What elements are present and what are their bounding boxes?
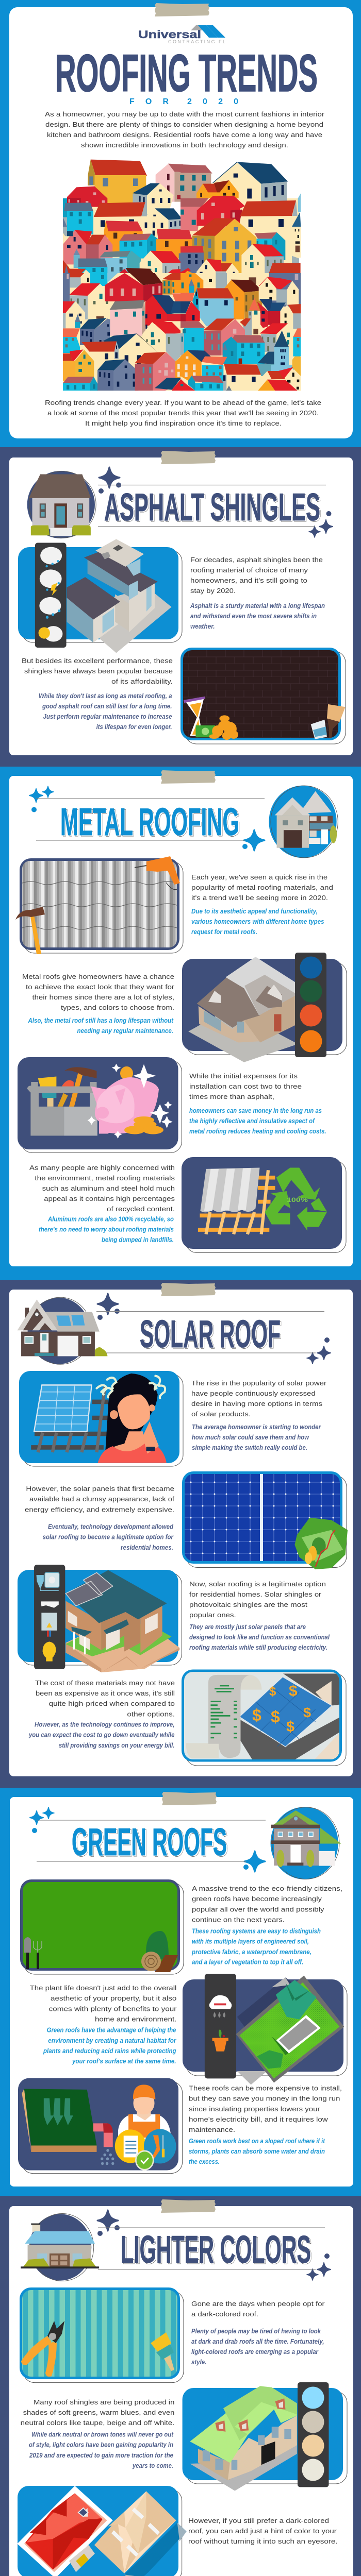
panel: solar roof section (9, 1283, 353, 1776)
text: lighter colors intro: Gone are the days when people opt for (191, 2300, 325, 2308)
text: green roof cost: home's electricity bill, and it requires low (189, 2115, 328, 2123)
text: asphalt intro: Asphalt is a sturdy material with a long lifespan (190, 602, 325, 609)
text: asphalt intro (190, 556, 325, 630)
text: lighter color shades: neutral colors like taupe, beige and off white. (21, 2419, 174, 2427)
heading rules (96, 1312, 324, 1353)
heading: green roofs: GREEN ROOFS (72, 1820, 227, 1863)
text: lighter colors intro: a dark-colored roof. (191, 2310, 258, 2318)
text: lighter color alternatives: roof, you can add just a hint of color to your (188, 2527, 337, 2535)
text: green roof cost: storms, plants can absorb some water and drain (189, 2147, 325, 2155)
panel: weather resistant building (18, 539, 182, 653)
text: metal cost (189, 1072, 326, 1135)
tape (155, 3, 209, 16)
text: metal cost: the highly reflective and insulative aspect of (189, 1117, 315, 1125)
heading: metal roofing (60, 800, 240, 844)
text: metal cost: installation can cost two to three (189, 1082, 302, 1090)
intro text: shown incredible innovations in both technology and design. (81, 141, 288, 149)
text: green roof cost: These roofs can be more expensive to install, (189, 2084, 342, 2092)
text: metal environment: such as aluminum and steel hold much (42, 1184, 175, 1192)
text: lighter color alternatives: roof without turning it into such an eyesore. (188, 2537, 337, 2545)
heading: green roofs: GREEN ROOFS (73, 1821, 228, 1865)
panel: metal roof house with color swatches (182, 953, 347, 1062)
text: green roof benefits: comes with plenty of benefits to your (49, 2005, 177, 2012)
illustration: colorful city of houses (63, 160, 301, 391)
panel: green roofs section (10, 1792, 353, 2187)
text: solar shingles: Now, solar roofing is a legitimate option (189, 1580, 326, 1588)
text: metal cost: metal roofing reduces heating and cooling costs. (189, 1127, 326, 1135)
text: solar popularity: desire in having more options in terms (191, 1400, 323, 1408)
panel: metal roof panels with tools (15, 856, 183, 954)
strip: rain and plant icons (205, 1974, 236, 2078)
text: solar popularity: The average homeowner is starting to wonder (192, 1423, 321, 1431)
text: metal cost: times more than asphalt, (189, 1093, 274, 1100)
text: metal environment: the environment, metal roofing materials (35, 1174, 175, 1182)
text: solar cost: However, as the technology continues to improve, (35, 1721, 174, 1728)
subtitle: FOR (129, 97, 169, 106)
panel: light green roof house with swatches (183, 2382, 347, 2491)
text: metal popularity: popularity of metal roofing materials, and (191, 884, 333, 891)
tape (162, 1792, 217, 1805)
text: lighter colors intro: style. (191, 2358, 206, 2366)
text: asphalt intro: weather. (190, 622, 215, 630)
text: solar popularity (191, 1379, 327, 1451)
text: solar popularity: of solar products. (191, 1410, 251, 1418)
text: metal environment: appeal as it contains high percentages (44, 1195, 175, 1202)
panel: asphalt shingles section (9, 451, 353, 755)
text: lighter colors intro: Plenty of people may be tired of having to look (191, 2327, 321, 2335)
icon: solar house (17, 1297, 107, 1364)
text: solar history: energy efficiency, and extremely expensive. (25, 1506, 174, 1514)
icon: asphalt house (27, 471, 96, 538)
text: metal styles (22, 973, 175, 1035)
text: green roofs intro: These roofing systems are easy to distinguish (192, 1927, 321, 1935)
text: metal styles: types, and colors to choose from. (61, 1004, 174, 1011)
text: asphalt affordability: of its affordability. (111, 677, 173, 685)
text: metal popularity (191, 873, 333, 936)
text: solar cost: still providing savings on your energy bill. (59, 1741, 174, 1749)
logo: Universal Contracting FL: CONTRACTING FL (168, 39, 225, 44)
sparkles (97, 1294, 331, 1364)
intro text: kitchen and bathroom designs. Residential roofs have come a long way and have (47, 131, 322, 139)
heading rules (98, 2228, 325, 2269)
text: metal popularity: Each year, we've seen a quick rise in the (191, 873, 327, 881)
text: metal styles: their homes since there are a lot of styles, (32, 993, 174, 1001)
text: solar history: solar roofing to become a legitimate option for (43, 1533, 174, 1541)
text: green roof cost: but they can save you money in the long run (189, 2095, 340, 2103)
panel: aerial green roof (183, 1974, 347, 2084)
text: asphalt affordability: its lifespan for even longer. (96, 723, 172, 731)
text: lighter color shades: While dark neutral or brown tones will never go out (31, 2431, 174, 2438)
text: green roof benefits (30, 1984, 177, 2065)
dollar signs: $ (303, 1705, 311, 1720)
text: green roof cost: the excess. (189, 2158, 220, 2165)
sparkles (30, 1807, 265, 1872)
sparkles (99, 467, 333, 537)
text: solar shingles (189, 1580, 330, 1651)
dollar signs: $ (286, 1719, 294, 1735)
logo: Universal Contracting FL (138, 25, 225, 44)
text: green roof benefits: plants and reducing acid rains while protecting (43, 2047, 176, 2055)
text: metal styles: Also, the metal roof still has a long lifespan without (28, 1016, 174, 1024)
panel: drainage board and maintenance worker (18, 2078, 183, 2174)
dollar signs: $ (289, 1683, 298, 1700)
icon: fan of cash with arrow (294, 1518, 348, 1569)
icon: pliers (21, 2321, 64, 2377)
text: metal environment: Aluminum roofs are also 100% recyclable, so (47, 1215, 174, 1223)
text: asphalt intro: stay by 2020. (190, 587, 236, 595)
text: lighter color shades: 2019 and are expected to gain more traction for the (29, 2451, 173, 2459)
dollar signs: $ (271, 1707, 280, 1726)
dollar signs: $ (269, 1685, 276, 1699)
heading rules (37, 1820, 266, 1861)
text: green roofs intro (191, 1885, 342, 1966)
panel: woman considering solar panels (19, 1371, 183, 1466)
closing intro text (45, 399, 321, 427)
text: asphalt affordability: Just perform regular maintenance to increase (43, 713, 172, 720)
text: metal popularity: various homeowners with different home types (191, 918, 324, 925)
tape (161, 451, 216, 464)
panel: lighter colors section (9, 2199, 353, 2576)
panel: grass turf with tools (20, 1879, 184, 1974)
text: metal popularity: request for metal roofs. (191, 928, 257, 936)
text: asphalt affordability: While they don't last as long as metal roofing, a (39, 692, 172, 700)
text: asphalt intro: For decades, asphalt shingles been the (190, 556, 323, 564)
closing intro text: a look at some of the most popular trends this year that we'll be seeing in 2020. (47, 409, 319, 417)
text: solar shingles: photovoltaic shingles are the most (189, 1601, 307, 1608)
text: lighter color shades: of style, light colors have been gaining popularity in (29, 2441, 173, 2449)
text: solar shingles: roofing materials while still producing electricity. (189, 1643, 327, 1651)
swatch strip (295, 953, 326, 1057)
text: green roofs intro: green roofs have become increasingly (192, 1895, 322, 1903)
icon: drill (146, 856, 180, 885)
text: metal styles: Metal roofs give homeowners have a chance (22, 973, 174, 980)
text: solar popularity: have people continuously expressed (191, 1389, 316, 1397)
tape (161, 1283, 216, 1296)
panel: recyclable metal sheet (182, 1157, 346, 1253)
text: solar cost: you can expect the cost to go down eventually while (28, 1731, 174, 1739)
icon: green roof house (271, 1807, 341, 1879)
heading rules (98, 485, 326, 527)
text: solar popularity: simple making the switch really could be. (192, 1444, 307, 1451)
text: lighter color shades (21, 2398, 174, 2469)
text: green roofs intro: with its multiple layers of engineered soil, (192, 1938, 309, 1945)
text: green roofs intro: protective fabric, a waterproof membrane, (191, 1948, 311, 1956)
closing intro text: Roofing trends change every year. If you want to be ahead of the game, let's take (45, 399, 321, 406)
text: green roofs intro: popular all over the world and possibly (192, 1905, 324, 1913)
icon: light blue roof house (21, 2213, 99, 2281)
text: asphalt affordability: shingles have always been popular because (24, 667, 173, 675)
text: lighter colors intro (191, 2300, 325, 2366)
intro text: design. But there are plenty of things to consider when designing a home beyond (45, 121, 323, 128)
text: metal environment: As many people are highly concerned with (29, 1164, 175, 1172)
text: solar shingles: They are mostly just solar panels that are (189, 1623, 306, 1631)
strip: plug, lamp, panel and bulb icons (34, 1565, 65, 1669)
panel: receipt and solar roof with dollars (182, 1669, 346, 1766)
icon: hammer (15, 907, 45, 954)
heading: green roofs (72, 1820, 228, 1865)
text: green roof benefits: your roof's surface at the same time. (72, 2057, 176, 2065)
text: lighter colors intro: at dark and drab roofs all the time. Fortunately, (191, 2337, 324, 2345)
text: solar popularity: how much solar could save them and how (192, 1433, 309, 1441)
panel: blue solar panels with cash (182, 1471, 348, 1569)
sparkles (97, 2210, 331, 2280)
text: metal styles: needing any regular maintenance. (77, 1027, 173, 1035)
text: lighter color alternatives: However, if you still prefer a dark-colored (188, 2517, 329, 2524)
label: 100%: 100% (287, 1196, 308, 1204)
text: green roof cost: maintenance. (189, 2126, 235, 2133)
text: solar history: However, the solar panels that first became (26, 1485, 174, 1493)
text: metal popularity: it's a trend we'll be seeing more in 2020. (191, 894, 328, 902)
heading rules (36, 799, 265, 840)
subtitle: 2020 (187, 97, 238, 106)
text: solar shingles: designed to look like and function as conventional (189, 1633, 330, 1641)
dollar signs: $ (252, 1706, 261, 1724)
panel: savings toolbox and piggy bank (18, 1057, 182, 1153)
panel: aerial red and beige roofs (17, 2486, 187, 2576)
text: solar cost: The cost of these materials may not have (35, 1679, 175, 1687)
subtitle (129, 97, 238, 106)
dollar signs (252, 1683, 311, 1735)
text: solar shingles: popular ones. (189, 1611, 236, 1619)
text: green roofs intro: and a layer of vegetation to top it all off. (192, 1958, 303, 1966)
text: solar cost (28, 1679, 175, 1749)
text: lighter color alternatives (188, 2517, 337, 2545)
text: green roof benefits: aesthetic of your property, but it also (51, 1994, 176, 2002)
text: metal cost: homeowners can save money in the long run as (189, 1107, 322, 1114)
text: solar history: available had a clumsy appearance, lack of (29, 1495, 174, 1503)
logo: Universal Contracting FL: Universal (138, 29, 201, 41)
icon: metal roof house (269, 786, 338, 858)
intro text: As a homeowner, you may be up to date with the most current fashions in interior (45, 110, 325, 118)
text: metal environment: being dumped in landfills. (102, 1236, 174, 1244)
text: solar cost: other options. (127, 1710, 175, 1718)
text: asphalt affordability: But besides its excellent performance, these (22, 657, 173, 665)
panel: intro card (9, 3, 353, 438)
swatch strip (298, 2382, 329, 2487)
text: solar shingles: for residential homes. Solar shingles or (189, 1590, 322, 1598)
text: lighter color shades: shades of soft greens, warm blues, and even (23, 2409, 174, 2416)
panel: metal roofing section (9, 770, 353, 1266)
icon: paint brush (151, 2332, 174, 2371)
text: green roof benefits: Green roofs have the advantage of helping the (47, 2026, 176, 2034)
text: asphalt affordability: good asphalt roof can still last for a long time. (42, 702, 172, 710)
text: asphalt intro: homeowners, and it's still going to (190, 577, 307, 584)
text: asphalt affordability (22, 657, 173, 731)
text: lighter color shades: years to come. (132, 2462, 173, 2469)
weather icons strip (35, 543, 67, 648)
text: metal styles: to achieve the exact look that they want for (26, 983, 175, 991)
sparkles (29, 786, 265, 851)
text: asphalt intro: and withstand even the most severe shifts in (190, 612, 317, 620)
panel: light teal roofing with tools (20, 2287, 184, 2383)
panel: solar house with energy icons (18, 1565, 182, 1672)
text: solar history: Eventually, technology development allowed (48, 1523, 174, 1531)
heading: solar roof (140, 1312, 282, 1357)
tape (161, 2199, 216, 2213)
icon: shovel and fork (24, 1937, 42, 1969)
text: metal environment (29, 1164, 175, 1244)
text: green roofs intro: continue on the next years. (192, 1916, 285, 1924)
text: solar cost: been as expensive as it once was, it's still (36, 1689, 175, 1697)
text: asphalt intro: roofing material of choice of many (190, 566, 308, 574)
text: green roof cost: since insulating properties lowers your (189, 2105, 320, 2113)
text: metal cost: While the initial expenses for its (189, 1072, 298, 1080)
text: green roof benefits: home and environment. (95, 2015, 176, 2023)
intro text (45, 110, 325, 149)
text: solar history: residential homes. (121, 1544, 173, 1551)
panel: shingle texture with cost icons (180, 648, 346, 744)
icon: turf roll (141, 1931, 178, 1972)
text: lighter color shades: Many roof shingles are being produced in (34, 2398, 174, 2406)
text: green roof cost (189, 2084, 342, 2165)
text: green roof cost: Green roofs work best on a sloped roof where if it (189, 2137, 325, 2145)
text: green roof benefits: environment by creating a natural habitat for (48, 2037, 176, 2044)
text: green roof benefits: The plant life doesn't just add to the overall (30, 1984, 177, 1992)
text: solar popularity: The rise in the popularity of solar power (191, 1379, 327, 1387)
text: metal environment: of recycled content. (107, 1205, 175, 1213)
text: green roofs intro: A massive trend to the eco-friendly citizens, (192, 1885, 342, 1892)
text: solar cost: quite high-priced when compared to (49, 1700, 175, 1707)
text: lighter colors intro: light-colored roofs are emerging as a popular (191, 2348, 319, 2355)
text: solar history (25, 1485, 174, 1551)
icons: hourglass, cash, coins, paint (184, 697, 346, 740)
closing intro text: It might help you find inspiration once it's time to replace. (85, 419, 282, 427)
tape (161, 770, 216, 784)
text: metal popularity: Due to its aesthetic appeal and functionality, (191, 907, 318, 915)
text: metal environment: there's no need to worry about roofing materials (39, 1226, 174, 1233)
